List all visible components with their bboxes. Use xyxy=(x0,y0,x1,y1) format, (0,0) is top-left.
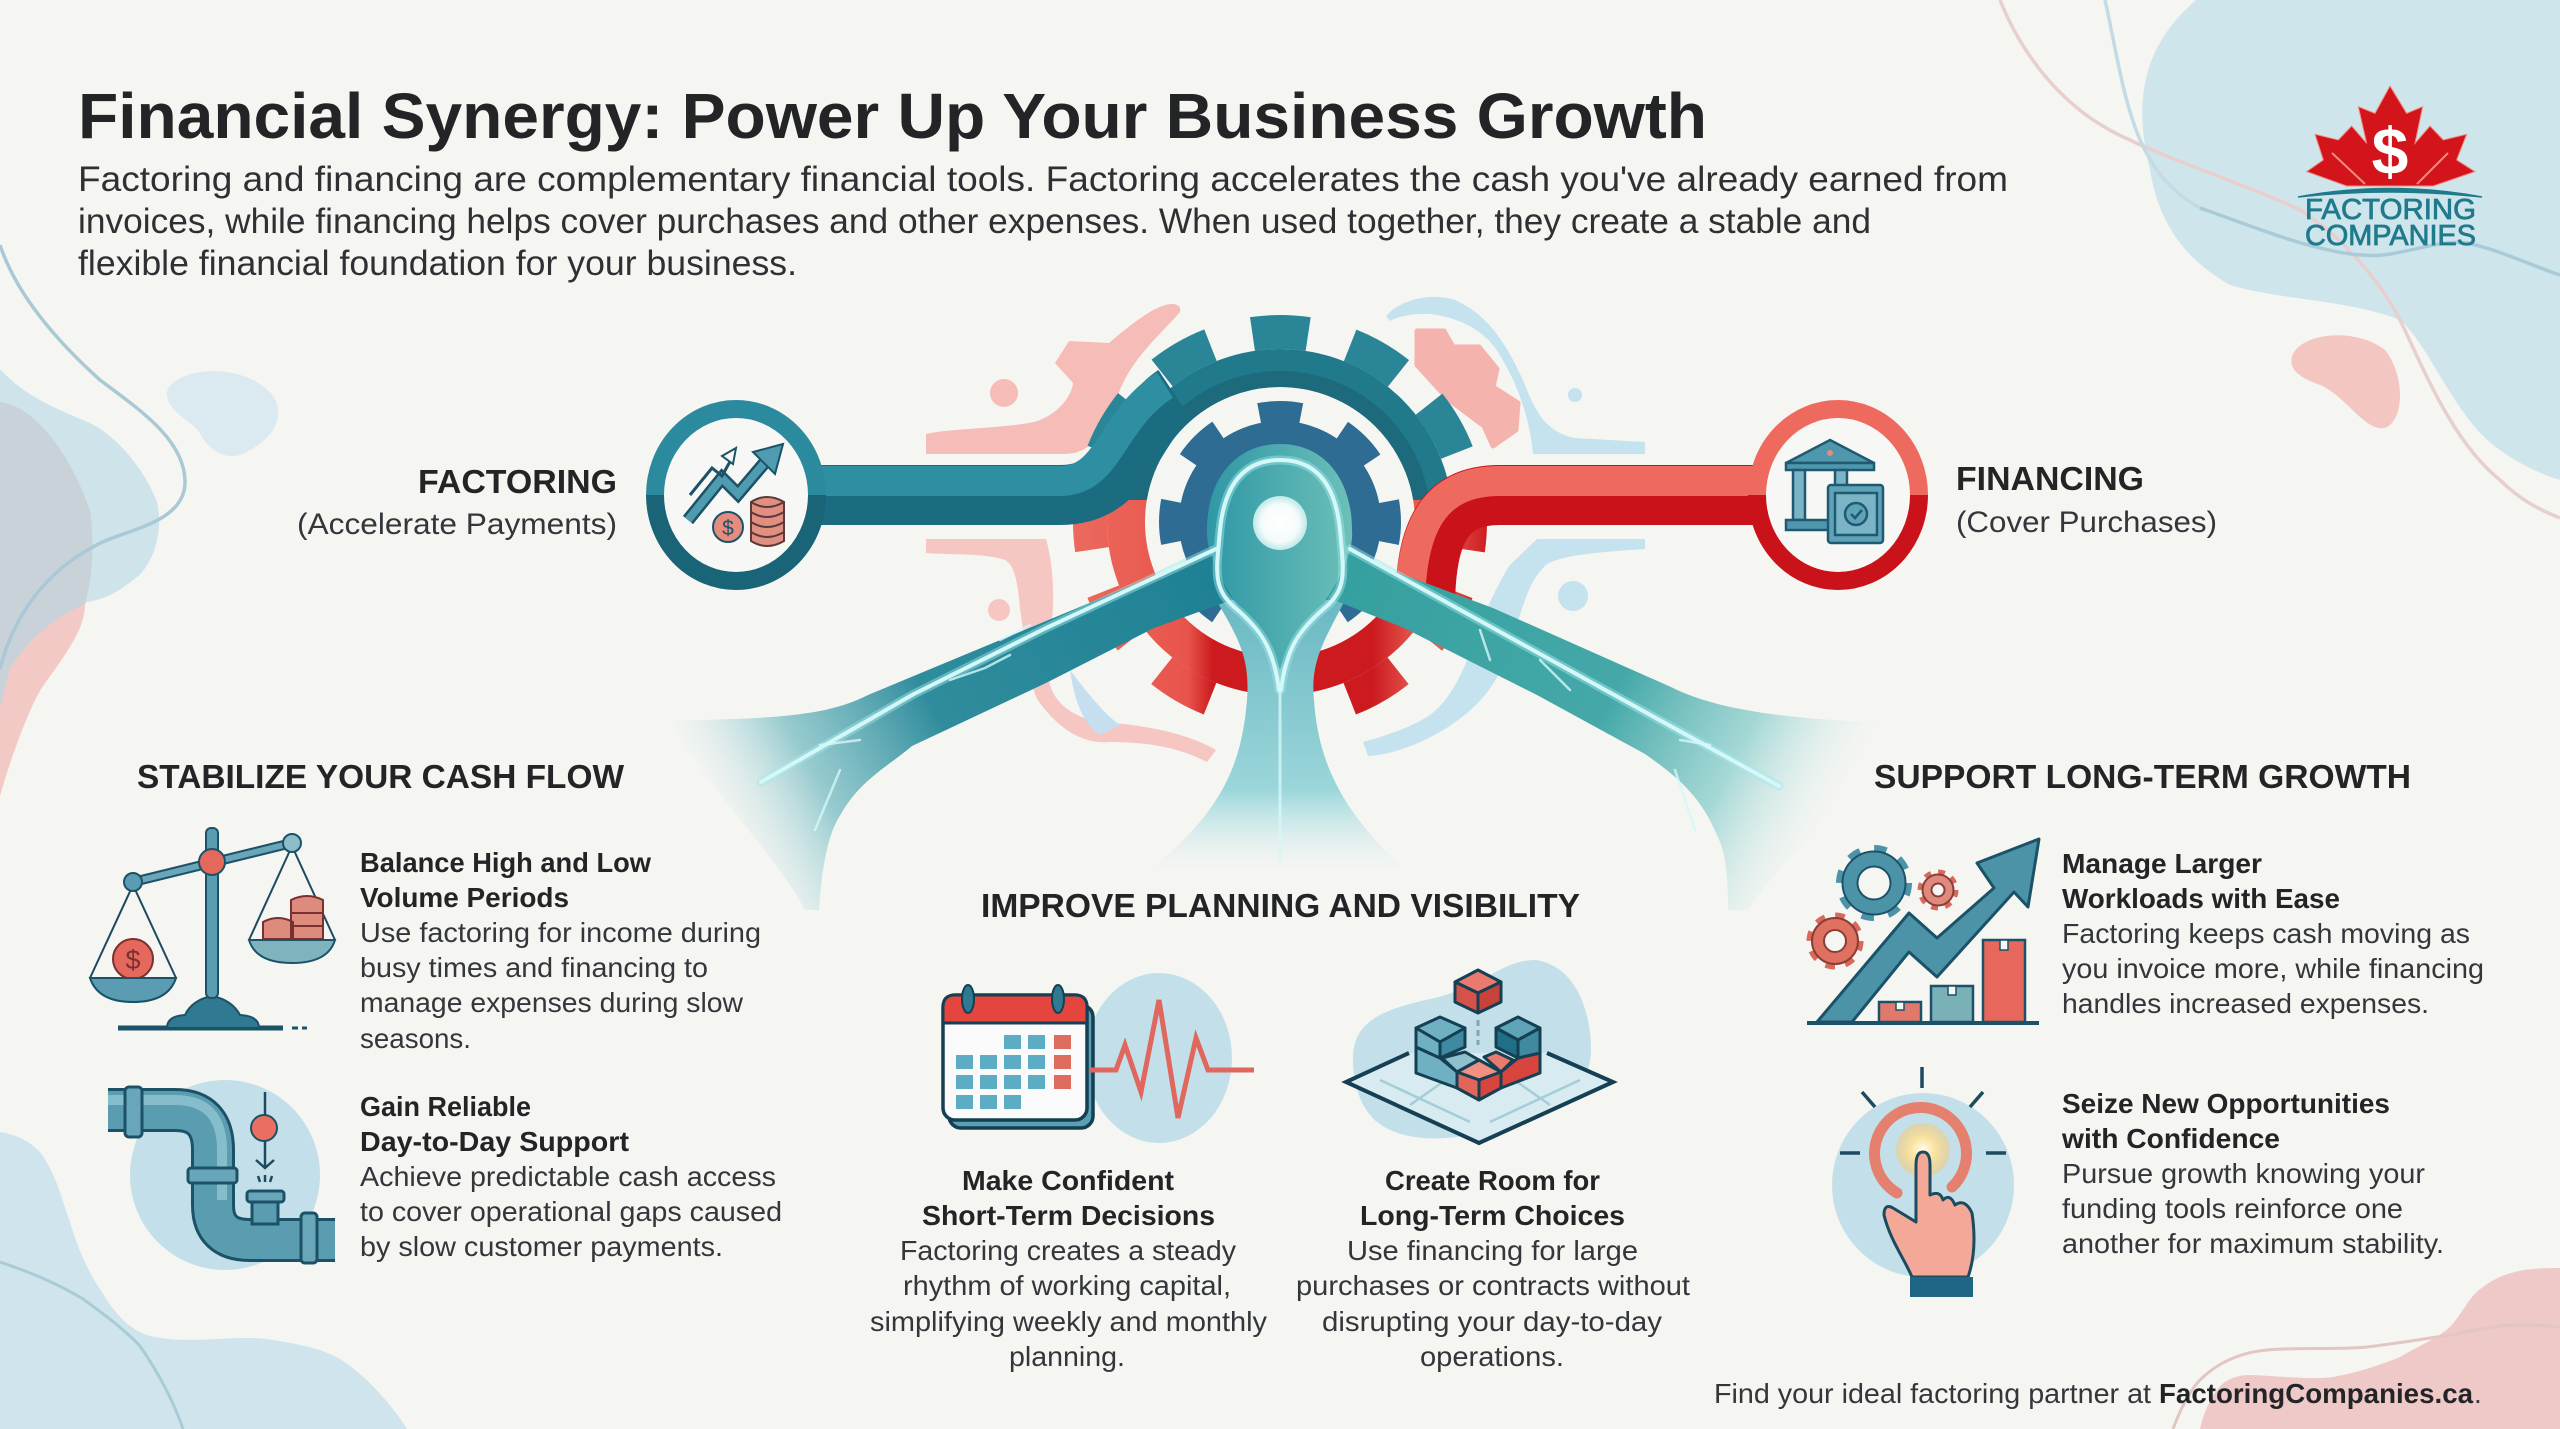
icon: bank and safe xyxy=(1786,440,1883,543)
label: financing xyxy=(1956,460,2217,539)
item: manage larger workloads xyxy=(2062,848,2484,1019)
item: make confident short-term decisions: rhythm of working capital, xyxy=(903,1270,1231,1301)
decoration: bottom left blob xyxy=(0,1132,407,1429)
logo dollar sign: $ xyxy=(2372,114,2408,188)
bright lines xyxy=(761,460,1779,860)
item: seize new opportunities xyxy=(2061,1088,2444,1259)
item: balance high and low: Volume Periods xyxy=(360,882,569,913)
item: create room for long-term choices: purchases or contracts without xyxy=(1296,1270,1690,1301)
logo wordmark xyxy=(2305,194,2476,252)
center stream xyxy=(1150,600,1405,870)
decoration: pink blob right xyxy=(2291,335,2400,428)
decoration: bottom right blob xyxy=(2173,1268,2560,1429)
item: make confident short-term decisions: Factoring creates a steady xyxy=(900,1235,1236,1266)
intro paragraph: flexible financial foundation for your business. xyxy=(78,244,797,283)
item: seize new opportunities: Pursue growth knowing your xyxy=(2062,1158,2425,1189)
item: manage larger workloads: Factoring keeps cash moving as xyxy=(2062,918,2470,949)
heading: SUPPORT LONG-TERM GROWTH xyxy=(1874,758,2411,795)
central hole xyxy=(1253,496,1307,550)
panel: improve planning and visibility xyxy=(870,887,1690,1372)
decoration: top right blob xyxy=(2142,0,2560,480)
item: make confident short-term decisions: Short-Term Decisions xyxy=(922,1200,1215,1231)
outer gear top: teal xyxy=(1088,315,1473,500)
outer gear bottom: red xyxy=(1073,500,1487,714)
footer call to action: FactoringCompanies.ca xyxy=(2159,1378,2473,1409)
decoration: right curves xyxy=(2000,0,2560,518)
icon: growth arrows and coins xyxy=(688,444,784,546)
item: balance high and low xyxy=(360,847,761,1054)
item: make confident short-term decisions: simplifying weekly and monthly xyxy=(870,1306,1267,1337)
item: balance high and low: Balance High and Low xyxy=(360,847,651,878)
item: create room for long-term choices: Long-Term Choices xyxy=(1360,1200,1625,1231)
central teardrop xyxy=(1207,444,1352,670)
item: balance high and low: manage expenses during slow xyxy=(360,987,744,1018)
label: financing: FINANCING xyxy=(1956,460,2144,497)
logo: Factoring Companies xyxy=(2298,86,2482,252)
item: seize new opportunities: Seize New Opportunities xyxy=(2062,1088,2390,1119)
item: create room for long-term choices: disrupting your day-to-day xyxy=(1322,1306,1662,1337)
financing ring and icon xyxy=(1757,409,1919,581)
ring: factoring xyxy=(655,409,817,581)
item: gain reliable: Achieve predictable cash access xyxy=(360,1161,776,1192)
heading: IMPROVE PLANNING AND VISIBILITY xyxy=(981,887,1580,924)
item: seize new opportunities: with Confidence xyxy=(2061,1123,2280,1154)
label: factoring: (Accelerate Payments) xyxy=(297,508,617,541)
logo wordmark: COMPANIES xyxy=(2305,220,2476,252)
item: manage larger workloads: Manage Larger xyxy=(2062,848,2262,879)
item: balance high and low: busy times and financing to xyxy=(360,952,708,983)
item: gain reliable: Gain Reliable xyxy=(360,1091,531,1122)
factoring ring and icon xyxy=(655,409,817,581)
intro paragraph: invoices, while financing helps cover purchases and other expenses. When used together, they create a stable and xyxy=(78,202,1871,241)
footer call to action xyxy=(1714,1378,2482,1409)
right stream xyxy=(1314,549,1895,910)
item: manage larger workloads: you invoice more, while financing xyxy=(2062,953,2484,984)
pale pink and blue shapes behind gears xyxy=(926,297,1645,762)
red band: financing xyxy=(1410,481,1760,610)
panel: stabilize your cash flow xyxy=(90,758,782,1270)
footer call to action: . xyxy=(2474,1378,2482,1409)
logo wordmark: FACTORING xyxy=(2305,194,2476,226)
label: factoring xyxy=(297,463,617,541)
intro paragraph: Factoring and financing are complementary financial tools. Factoring accelerates the cash you've already earned from xyxy=(78,160,2008,199)
icon: gears, rising arrow and boxes xyxy=(1807,839,2039,1023)
item: gain reliable: Day-to-Day Support xyxy=(360,1126,629,1157)
item: create room for long-term choices: operations. xyxy=(1420,1341,1564,1372)
icon: pipe with valve xyxy=(108,1080,335,1270)
item: create room for long-term choices: Create Room for xyxy=(1385,1165,1600,1196)
teal band: factoring xyxy=(815,385,1175,495)
label: factoring: FACTORING xyxy=(418,463,617,500)
icon: calendar with pulse xyxy=(943,973,1254,1143)
title: Financial Synergy: Power Up Your Business Growth xyxy=(78,80,1707,152)
item: balance high and low: seasons. xyxy=(360,1023,471,1054)
inner gear: navy xyxy=(1170,412,1390,632)
logo arc xyxy=(2298,188,2482,197)
item: balance high and low: Use factoring for income during xyxy=(360,917,761,948)
icon: balance scale: $ xyxy=(125,945,141,975)
item: seize new opportunities: funding tools reinforce one xyxy=(2062,1193,2403,1224)
intro paragraph xyxy=(78,160,2008,283)
decoration: left blobs xyxy=(0,245,278,796)
heading: STABILIZE YOUR CASH FLOW xyxy=(137,758,625,795)
item: gain reliable xyxy=(360,1091,782,1262)
central diagram: gears and streams xyxy=(671,297,1895,910)
icon: growth arrows and coins: $ xyxy=(722,517,734,540)
icon: balance scale xyxy=(90,828,335,1028)
item: make confident short-term decisions: Make Confident xyxy=(962,1165,1174,1196)
left stream xyxy=(671,549,1243,910)
item: create room for long-term choices: Use financing for large xyxy=(1347,1235,1638,1266)
item: manage larger workloads: handles increased expenses. xyxy=(2062,988,2429,1019)
item: seize new opportunities: another for maximum stability. xyxy=(2062,1228,2444,1259)
item: gain reliable: to cover operational gaps caused xyxy=(360,1196,782,1227)
light energy lines xyxy=(761,460,1779,860)
item: make confident short-term decisions: planning. xyxy=(1009,1341,1125,1372)
icon: leaf veins xyxy=(2332,153,2448,184)
footer call to action: Find your ideal factoring partner at xyxy=(1714,1378,2151,1409)
icon: isometric blocks on plan xyxy=(1346,960,1613,1143)
icon: hand pressing button xyxy=(1832,1067,2014,1297)
panel: support long-term growth xyxy=(1807,758,2484,1297)
ring: financing xyxy=(1757,409,1919,581)
item: make confident short-term decisions xyxy=(870,1165,1267,1372)
label: financing: (Cover Purchases) xyxy=(1956,506,2217,539)
glow under lines xyxy=(761,460,1779,786)
item: manage larger workloads: Workloads with Ease xyxy=(2062,883,2340,914)
item: gain reliable: by slow customer payments. xyxy=(360,1231,723,1262)
item: create room for long-term choices xyxy=(1296,1165,1690,1372)
icon: maple leaf xyxy=(2307,86,2475,186)
